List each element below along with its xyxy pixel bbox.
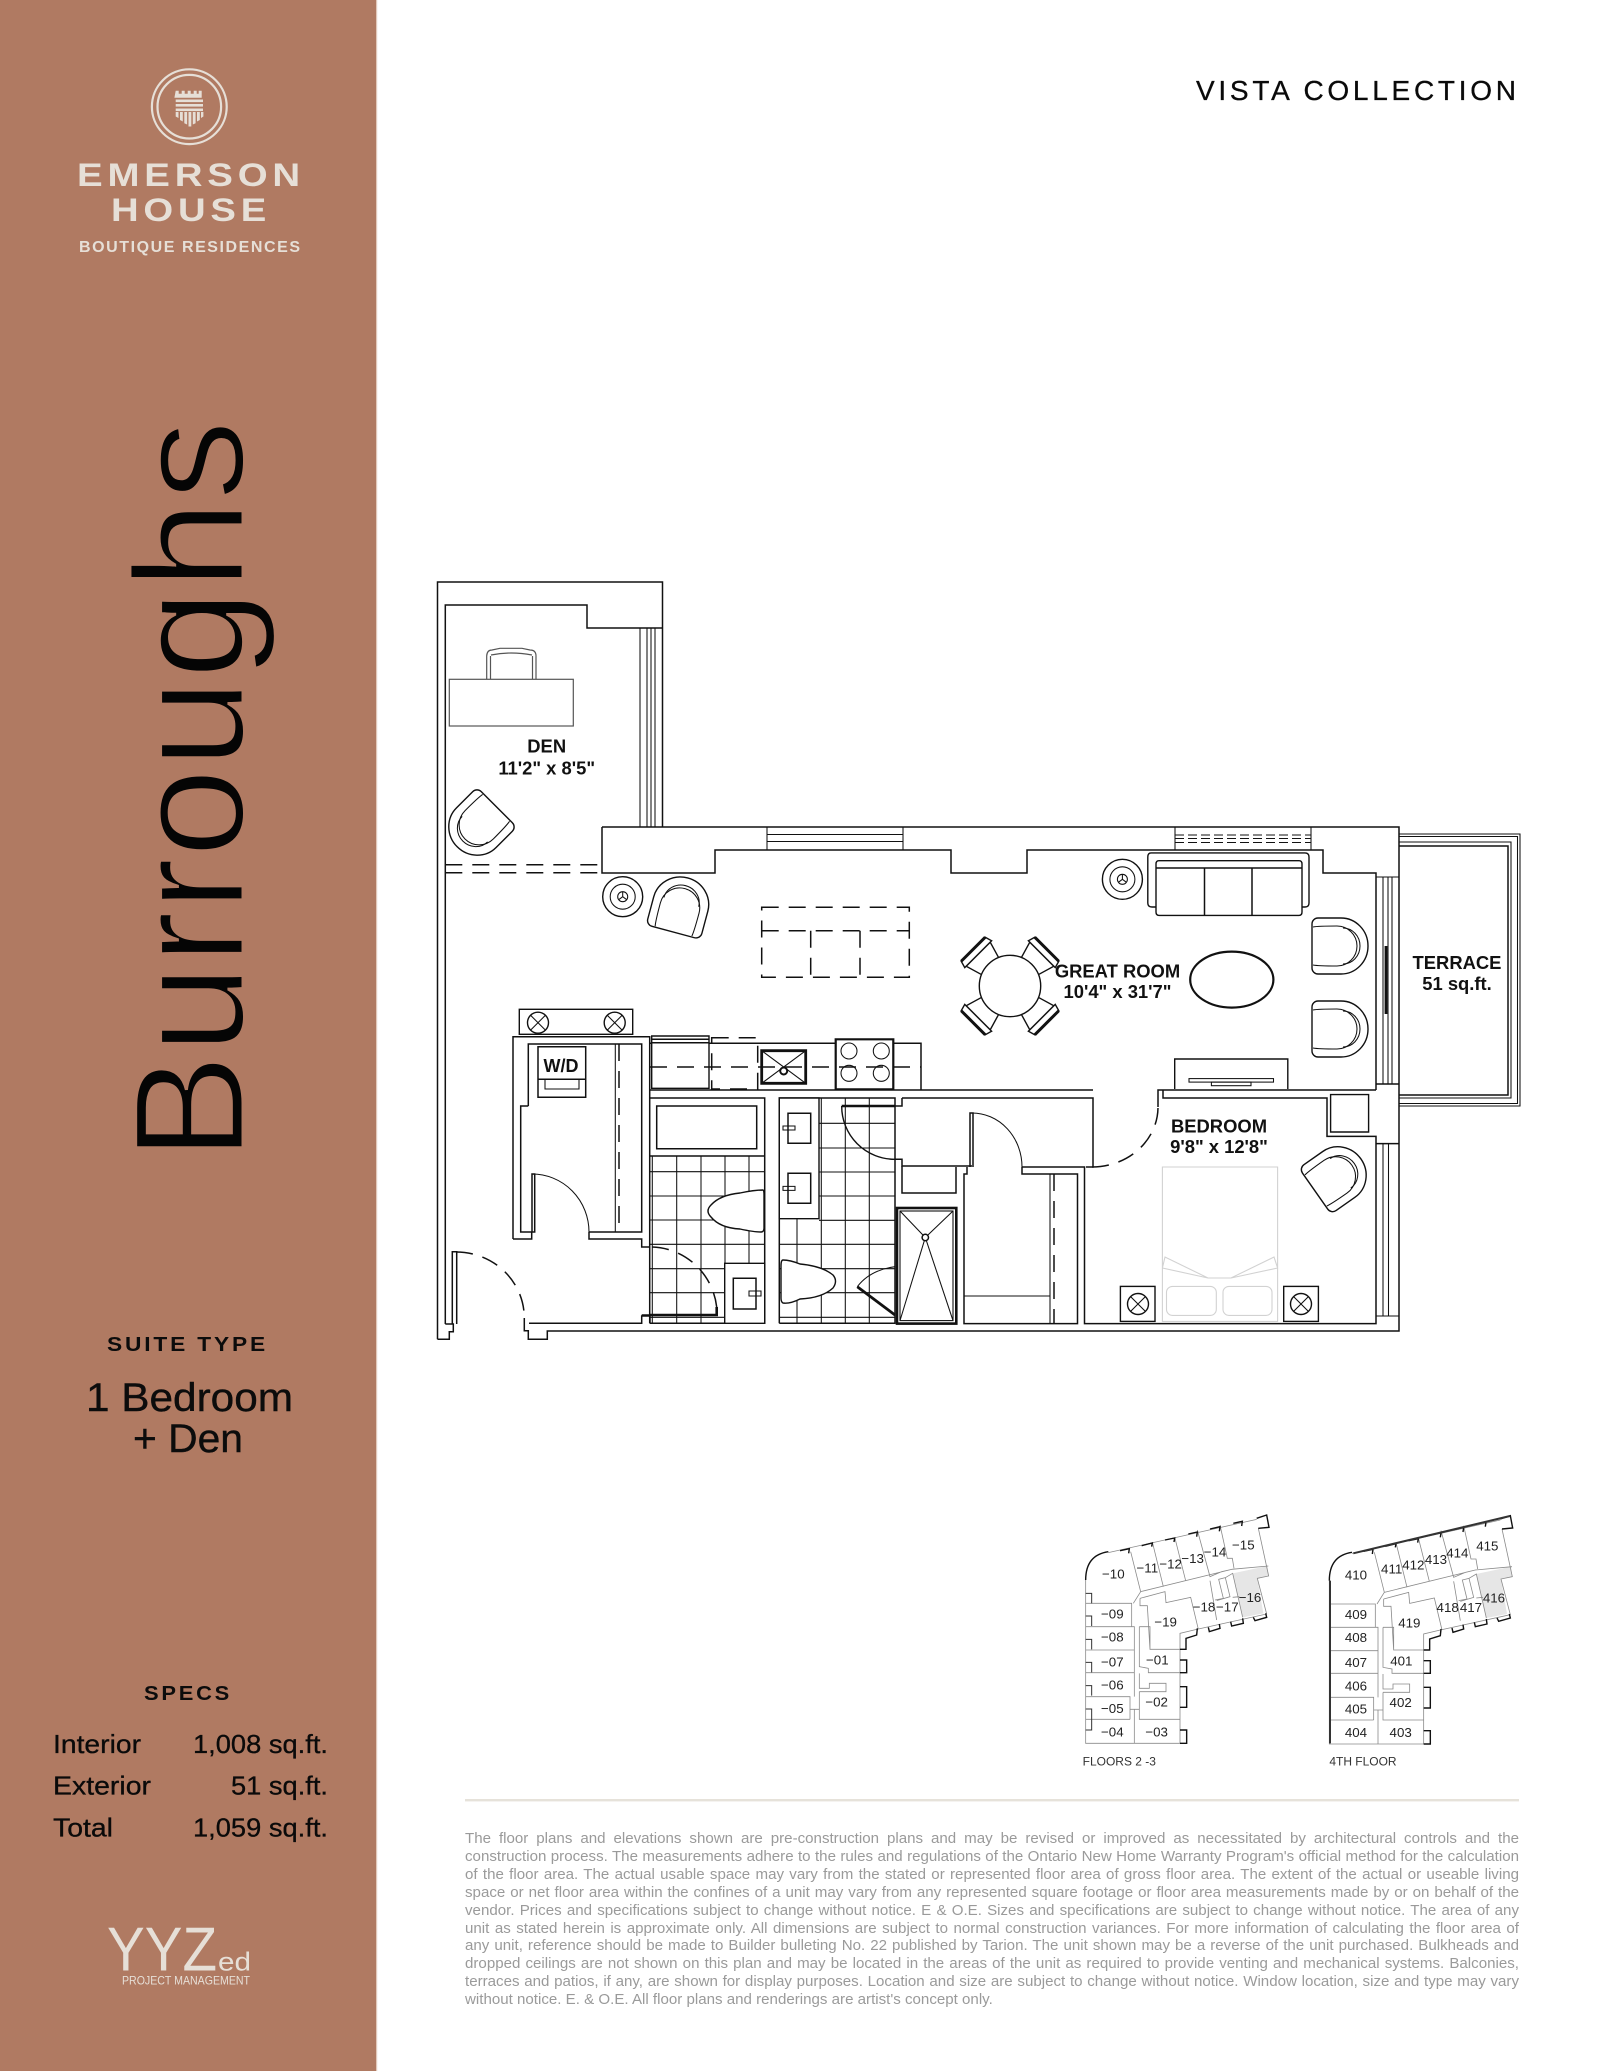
key plan: 4th floor: 402 [1390,1695,1412,1710]
dining table with chairs [960,936,1060,1036]
key plan: floors 2-3: −03 [1145,1724,1168,1739]
floor plan [437,582,1520,1339]
key plan: floors 2-3: −02 [1145,1694,1168,1709]
key plan: floors 2-3: −08 [1101,1629,1124,1644]
legal disclaimer: unit as stated herein is approximate only. All dimensions are subject to normal construction variances. For more information of calculating the floor area of [465,1920,1519,1937]
den furniture [437,648,573,867]
shower [897,1208,956,1324]
bedroom furniture [1120,1136,1377,1321]
suite name: Burroughs: Burroughs [103,420,277,1161]
room labels: 11'2" x 8'5" [498,758,595,778]
room labels [498,736,1501,1157]
key plan: 4th floor [1329,1516,1513,1769]
key plan: 4th floor: 413 [1425,1552,1447,1567]
washer dryer [538,1047,586,1097]
bathroom 2 [779,1098,895,1323]
key plan: 4th floor: 404 [1345,1725,1368,1740]
key plan: floors 2-3: −09 [1101,1607,1124,1622]
specs table: Total [53,1812,113,1842]
key plan: 4th floor: 403 [1390,1725,1412,1740]
room labels: BEDROOM [1171,1116,1267,1136]
suite type block [86,1334,293,1461]
key plan: floors 2-3: FLOORS 2 -3 [1083,1755,1156,1769]
logo: YYZed Project Management: YYZ [107,1916,217,1985]
key plan: floors 2-3: −05 [1101,1701,1124,1716]
legal disclaimer: dropped ceilings are not shown on this plan and may be located in the areas of the unit as required to provide venting and mechanical systems. Balconies, [465,1955,1519,1972]
legal disclaimer: any unit, reference should be made to Builder bulleting No. 22 published by Tarion. The unit shown may be a reverse of the unit purchased. Bulkheads and [465,1937,1519,1954]
sidebar panel [0,0,377,2071]
legal disclaimer: space or net floor area within the confines of a unit may vary from any represented square footage or floor area measurements made by or on behalf of the [465,1884,1519,1901]
key plan: floors 2-3: −14 [1204,1545,1227,1560]
suite type block: 1 Bedroom [86,1376,293,1420]
key plan: floors 2-3: −07 [1101,1654,1124,1669]
collection heading: VISTA COLLECTION [1196,75,1516,106]
key plan: 4th floor: 408 [1345,1630,1367,1645]
specs table: Interior [53,1729,141,1759]
key plan: 4th floor: 401 [1390,1653,1412,1668]
terrace outline [1399,834,1520,1106]
coat closet shelf [519,1009,633,1034]
structure: walls [438,582,1399,1339]
logo: Emerson House: BOUTIQUE RESIDENCES [79,239,300,256]
key plan: floors 2-3: −04 [1101,1724,1124,1739]
key plan: 4th floor: 418 [1437,1600,1459,1615]
logo: Emerson House: EMERSON [77,157,305,193]
specs table: 1,008 sq.ft. [193,1729,328,1759]
living furniture [603,853,1368,1089]
legal disclaimer: vendor. Prices and specifications subject to change without notice. E & O.E. Sizes and specifications are subject to change without notice. The area of any [465,1902,1519,1919]
key plan: 4th floor: 417 [1460,1600,1482,1615]
key plan: 4th floor: 415 [1476,1538,1498,1553]
key plan: 4th floor: 406 [1345,1678,1367,1693]
key plan: 4th floor: 410 [1345,1567,1367,1582]
key plan: floors 2-3: −11 [1137,1561,1158,1576]
bathroom 1 [642,1098,765,1323]
key plan: 4th floor: 409 [1345,1607,1367,1622]
key plan: 4th floor: 4TH FLOOR [1329,1755,1397,1769]
room labels: DEN [527,736,566,756]
key plan: floors 2-3: −01 [1146,1653,1169,1668]
kitchen counter and appliances [650,1036,921,1090]
logo: YYZed Project Management: PROJECT MANAGEMENT [122,1974,251,1988]
key plan: floors 2-3: −18 [1193,1599,1215,1614]
key plan: floors 2-3: −10 [1102,1567,1125,1582]
logo: Emerson House [77,69,305,256]
room labels: GREAT ROOM [1055,960,1180,982]
specs table: Exterior [53,1770,151,1800]
specs table: 51 sq.ft. [231,1770,328,1800]
legal disclaimer: without notice. E. & O.E. All floor plans and renderings are artist's concept only. [465,1991,993,2008]
specs table: 1,059 sq.ft. [193,1812,328,1842]
logo: Emerson House: HOUSE [111,192,271,228]
room labels: 51 sq.ft. [1422,973,1492,994]
key plan: floors 2-3: −16 [1239,1590,1261,1605]
legal disclaimer: construction process. The measurements adhere to the rules and regulations of the Ontario New Home Warranty Program's official method for the calculation [465,1848,1519,1865]
suite type block: SUITE TYPE [107,1334,268,1356]
legal disclaimer [465,1830,1519,2008]
washer dryer: W/D [544,1056,578,1076]
legal disclaimer: The floor plans and elevations shown are pre-construction plans and may be revised or improved as necessitated by architectural controls and the [465,1830,1519,1847]
legal disclaimer: terraces and patios, if any, are shown for display purposes. Location and size are subject to change without notice. Window location, size and type may vary [465,1973,1519,1990]
key plan: floors 2-3: −06 [1101,1678,1124,1693]
key plan: 4th floor: 419 [1398,1615,1420,1630]
room labels: 10'4" x 31'7" [1063,981,1172,1002]
key plan: 4th floor: 412 [1402,1557,1424,1572]
key plan: floors 2-3: −15 [1232,1538,1255,1553]
key plan: 4th floor: 414 [1446,1545,1469,1560]
key plan: 4th floor: 405 [1345,1702,1367,1717]
footer divider [465,1799,1519,1801]
key plan: 4th floor: 407 [1345,1655,1367,1670]
logo: YYZed Project Management: ed [218,1947,251,1977]
key plan: floors 2-3: −13 [1181,1551,1204,1566]
key plan: 4th floor: 411 [1381,1561,1402,1576]
key plan: floors 2-3: −17 [1216,1599,1239,1614]
key plan: floors 2-3: −19 [1154,1615,1177,1630]
room labels: 9'8" x 12'8" [1170,1136,1268,1157]
suite type block: + Den [133,1417,243,1461]
key plan: 4th floor: 416 [1483,1591,1505,1606]
specs table: SPECS [144,1683,232,1705]
specs table [53,1683,328,1842]
key plan: floors 2-3 [1083,1515,1269,1769]
linen shelf [902,1166,956,1193]
room labels: TERRACE [1413,952,1501,973]
key plan: floors 2-3: −12 [1159,1557,1182,1572]
legal disclaimer: of the floor area. The actual usable space may vary from the stated or represented floor area of gross floor area. The extent of the actual or useable living [465,1866,1519,1883]
